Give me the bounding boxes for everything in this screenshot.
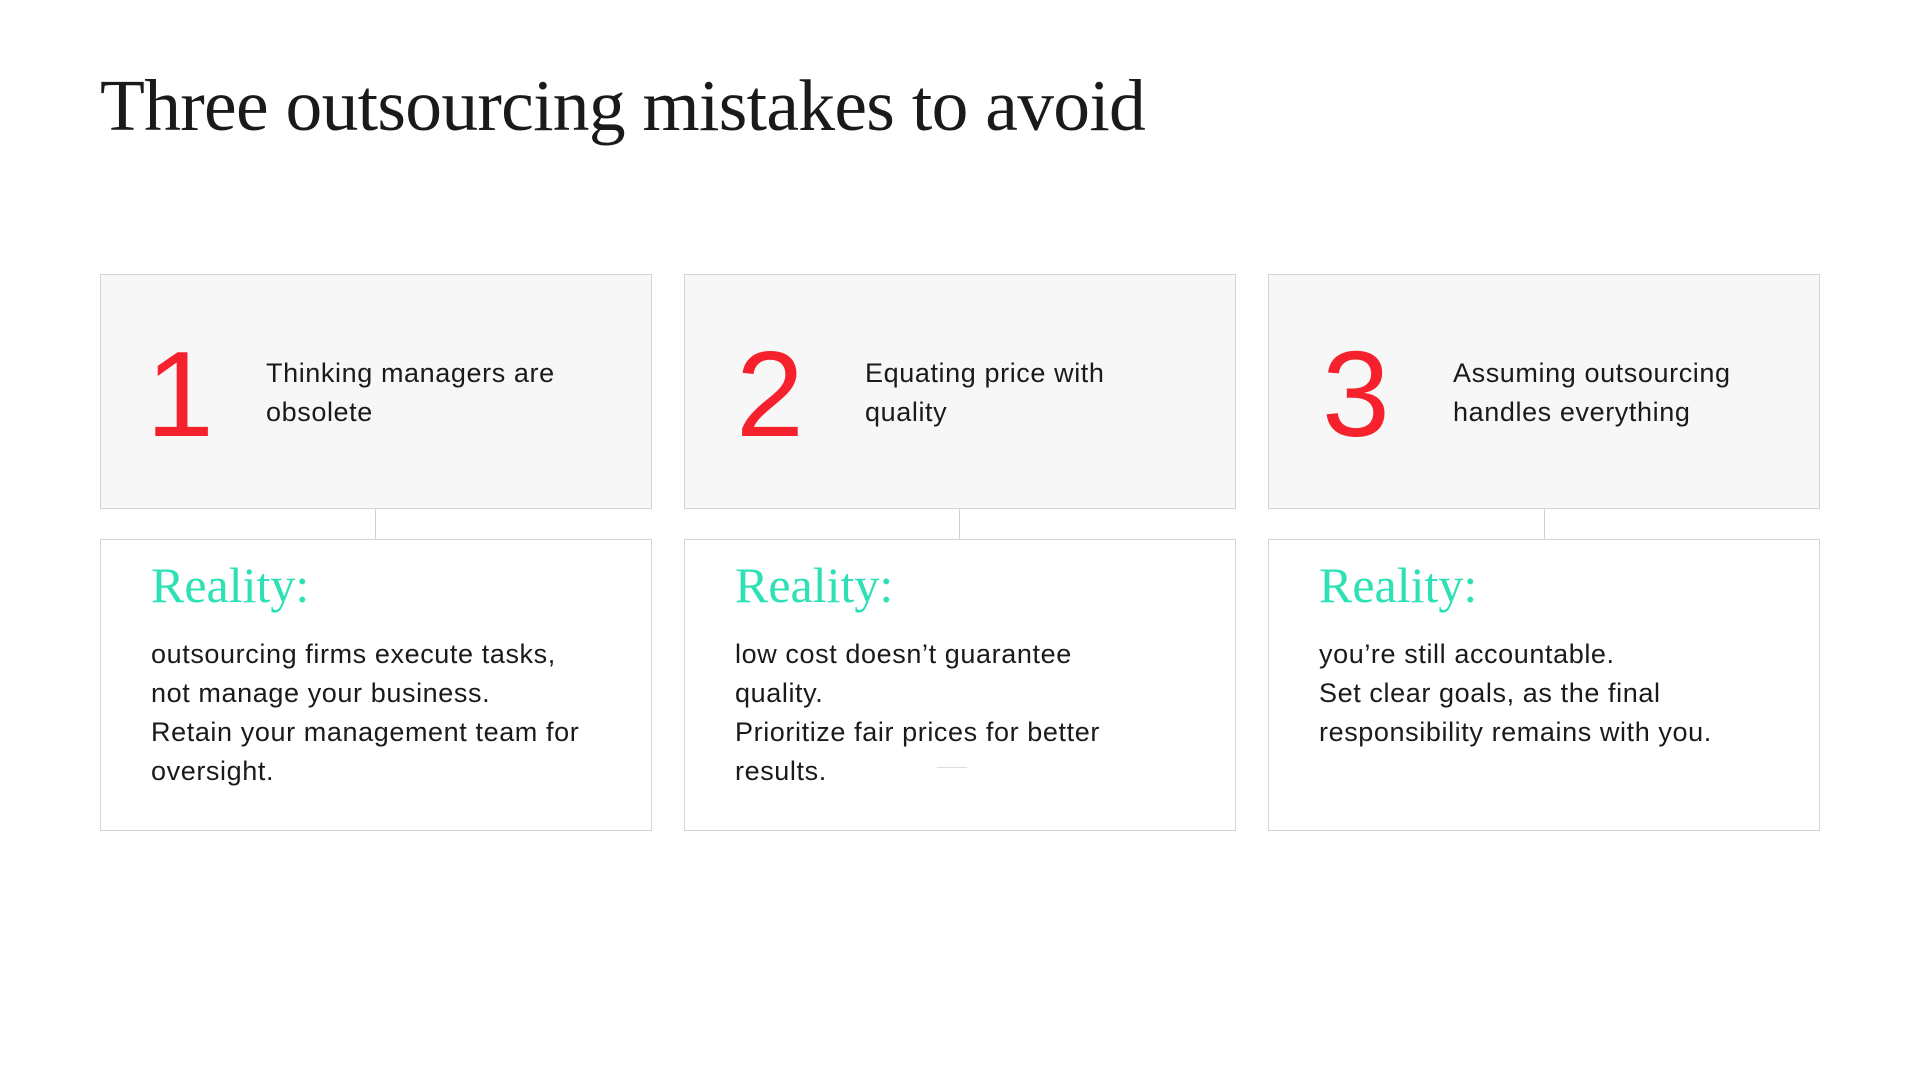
mistake 2 text: Equating price with quality bbox=[865, 358, 1105, 427]
reality 2 text: Prioritize fair prices for better results. bbox=[735, 717, 1100, 786]
reality 2 text bbox=[735, 639, 1100, 786]
reality 1 text: Retain your management team for oversight. bbox=[151, 717, 579, 786]
connector 3 bbox=[1544, 509, 1545, 539]
reality 1 text bbox=[151, 639, 579, 786]
number 1: 1 bbox=[146, 326, 214, 462]
panel: mistake 1 bbox=[100, 274, 652, 509]
arrow: small decorative bbox=[937, 767, 967, 768]
reality 3 heading: Reality: bbox=[1319, 557, 1477, 613]
mistake 3 text: Assuming outsourcing handles everything bbox=[1453, 358, 1731, 427]
panel: mistake 3 bbox=[1268, 274, 1820, 509]
panel: reality 2 bbox=[684, 539, 1236, 831]
reality 2 heading: Reality: bbox=[735, 557, 893, 613]
reality 3 text: Set clear goals, as the final responsibility remains with you. bbox=[1319, 678, 1712, 747]
reality 2 text: low cost doesn’t guarantee quality. bbox=[735, 639, 1072, 708]
mistake 1 text: Thinking managers are obsolete bbox=[266, 358, 555, 427]
panel: reality 1 bbox=[100, 539, 652, 831]
number 3: 3 bbox=[1322, 326, 1390, 462]
title: Three outsourcing mistakes to avoid bbox=[100, 65, 1145, 146]
reality 1 text: outsourcing firms execute tasks, not manage your business. bbox=[151, 639, 556, 708]
connector 2 bbox=[959, 509, 960, 539]
panel: mistake 2 bbox=[684, 274, 1236, 509]
panel: reality 3 bbox=[1268, 539, 1820, 831]
connector 1 bbox=[375, 509, 376, 539]
number 2: 2 bbox=[736, 326, 804, 462]
reality 3 text: you’re still accountable. bbox=[1319, 639, 1615, 669]
reality 1 heading: Reality: bbox=[151, 557, 309, 613]
reality 3 text bbox=[1319, 639, 1712, 747]
